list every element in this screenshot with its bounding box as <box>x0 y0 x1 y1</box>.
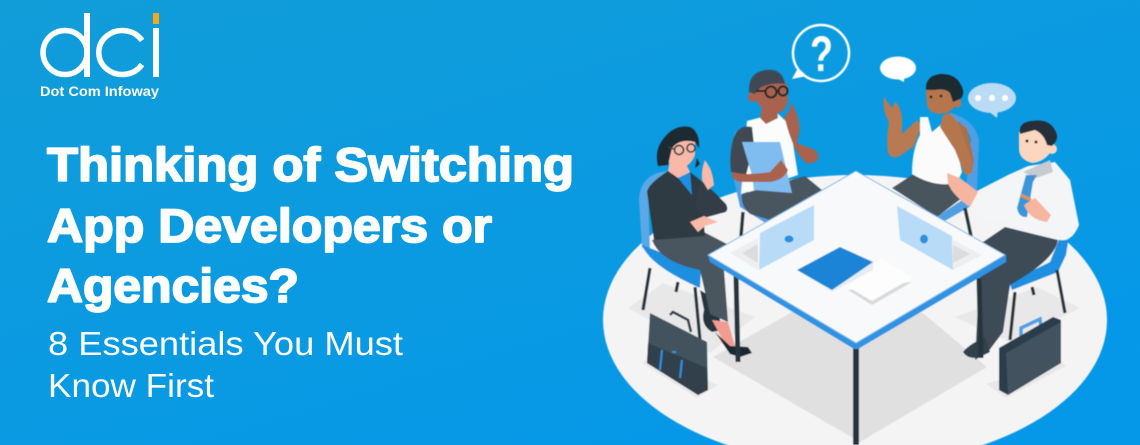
neck and head <box>668 160 690 178</box>
jacket <box>647 171 705 240</box>
blue folder <box>742 142 792 193</box>
neck and head <box>1019 128 1052 163</box>
question speech bubble <box>792 25 849 82</box>
chair <box>733 130 775 224</box>
left laptop <box>730 205 814 270</box>
logo letter i <box>153 13 159 77</box>
chair <box>1009 230 1070 290</box>
white speech bubble <box>880 56 916 82</box>
person: left woman <box>639 126 752 357</box>
subheading: 8 Essentials You Must <box>48 325 403 362</box>
face details <box>930 95 942 98</box>
person: middle man <box>730 70 822 236</box>
logo <box>40 13 160 99</box>
hair <box>749 70 785 94</box>
table <box>708 171 1006 349</box>
torso <box>741 113 798 194</box>
heading: App Developers or <box>47 199 492 252</box>
table top <box>708 171 1005 343</box>
right laptop <box>897 206 982 270</box>
left briefcase <box>647 312 708 395</box>
right briefcase <box>999 317 1061 395</box>
table legs <box>736 275 981 445</box>
jacket arm <box>695 180 727 218</box>
logo letter c <box>99 30 142 74</box>
person: right woman <box>884 74 979 236</box>
floor disc <box>603 175 1107 445</box>
hand <box>947 173 978 207</box>
question speech bubble: ? <box>810 26 833 82</box>
collar <box>1023 160 1053 178</box>
glasses <box>668 144 695 154</box>
table front edges <box>708 255 1006 349</box>
heading: Agencies? <box>47 259 299 312</box>
white top <box>912 117 962 184</box>
back leg and shoe <box>700 290 722 332</box>
pencil <box>1021 195 1031 200</box>
trousers <box>892 175 962 217</box>
heading: Thinking of Switching <box>47 138 574 191</box>
logo letter d <box>43 13 90 77</box>
left arm <box>884 97 922 157</box>
illustration: meeting <box>603 25 1107 445</box>
floor shadows <box>628 283 1080 442</box>
shirt <box>970 162 1079 240</box>
foot <box>712 320 735 346</box>
neck and head <box>760 108 778 124</box>
trousers <box>975 227 1058 360</box>
chair legs <box>643 268 700 340</box>
hair <box>926 74 963 102</box>
chair legs <box>1010 270 1065 340</box>
subheading <box>48 325 403 404</box>
person: right man <box>947 121 1079 360</box>
hair <box>1020 121 1057 146</box>
logo name: Dot Com Infoway <box>40 84 160 99</box>
forearm <box>940 113 972 175</box>
shoe <box>963 337 990 358</box>
sleeve <box>730 127 754 175</box>
shoe <box>715 332 752 357</box>
head <box>926 84 957 114</box>
raised hand <box>702 160 714 190</box>
right upper arm <box>945 120 974 175</box>
chair back and seat <box>639 171 667 248</box>
hair <box>657 126 699 166</box>
raised arm <box>784 102 818 164</box>
face details <box>1026 140 1038 144</box>
subheading: Know First <box>48 367 214 404</box>
glasses <box>756 86 788 98</box>
trousers <box>652 230 740 322</box>
lower hand <box>690 216 718 232</box>
paper stack <box>848 258 912 305</box>
blue folder <box>797 247 873 292</box>
lower arm <box>732 160 788 182</box>
trousers <box>742 176 822 220</box>
tie <box>1017 175 1037 217</box>
chair <box>938 113 979 222</box>
dots speech bubble <box>968 83 1016 118</box>
hand on tie <box>1024 198 1051 222</box>
heading <box>47 138 574 312</box>
